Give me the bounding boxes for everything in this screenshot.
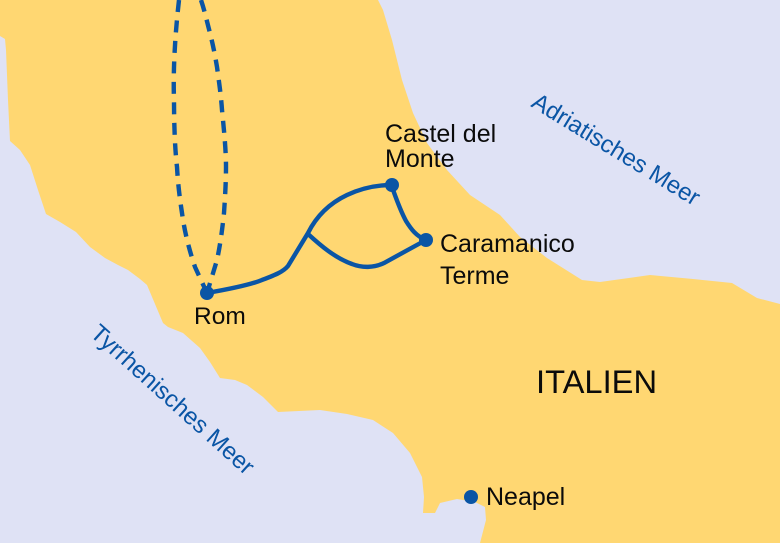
label: Neapel: Neapel (486, 483, 565, 511)
location dots (200, 178, 478, 504)
label: Rom: Rom (194, 303, 246, 330)
label: Caramanico: Caramanico (440, 230, 575, 258)
label: ITALIEN: ITALIEN (536, 363, 657, 400)
label: Adriatisches Meer: Adriatisches Meer (527, 88, 705, 211)
label: Castel del Monte: Castel del (385, 120, 496, 148)
label: Monte: Monte (385, 145, 454, 173)
route: solid lines (207, 185, 426, 293)
label: Terme: Terme (440, 262, 509, 290)
label: Tyrrhenisches Meer: Tyrrhenisches Meer (85, 319, 260, 480)
route: dashed lines to Rome (174, 0, 226, 293)
